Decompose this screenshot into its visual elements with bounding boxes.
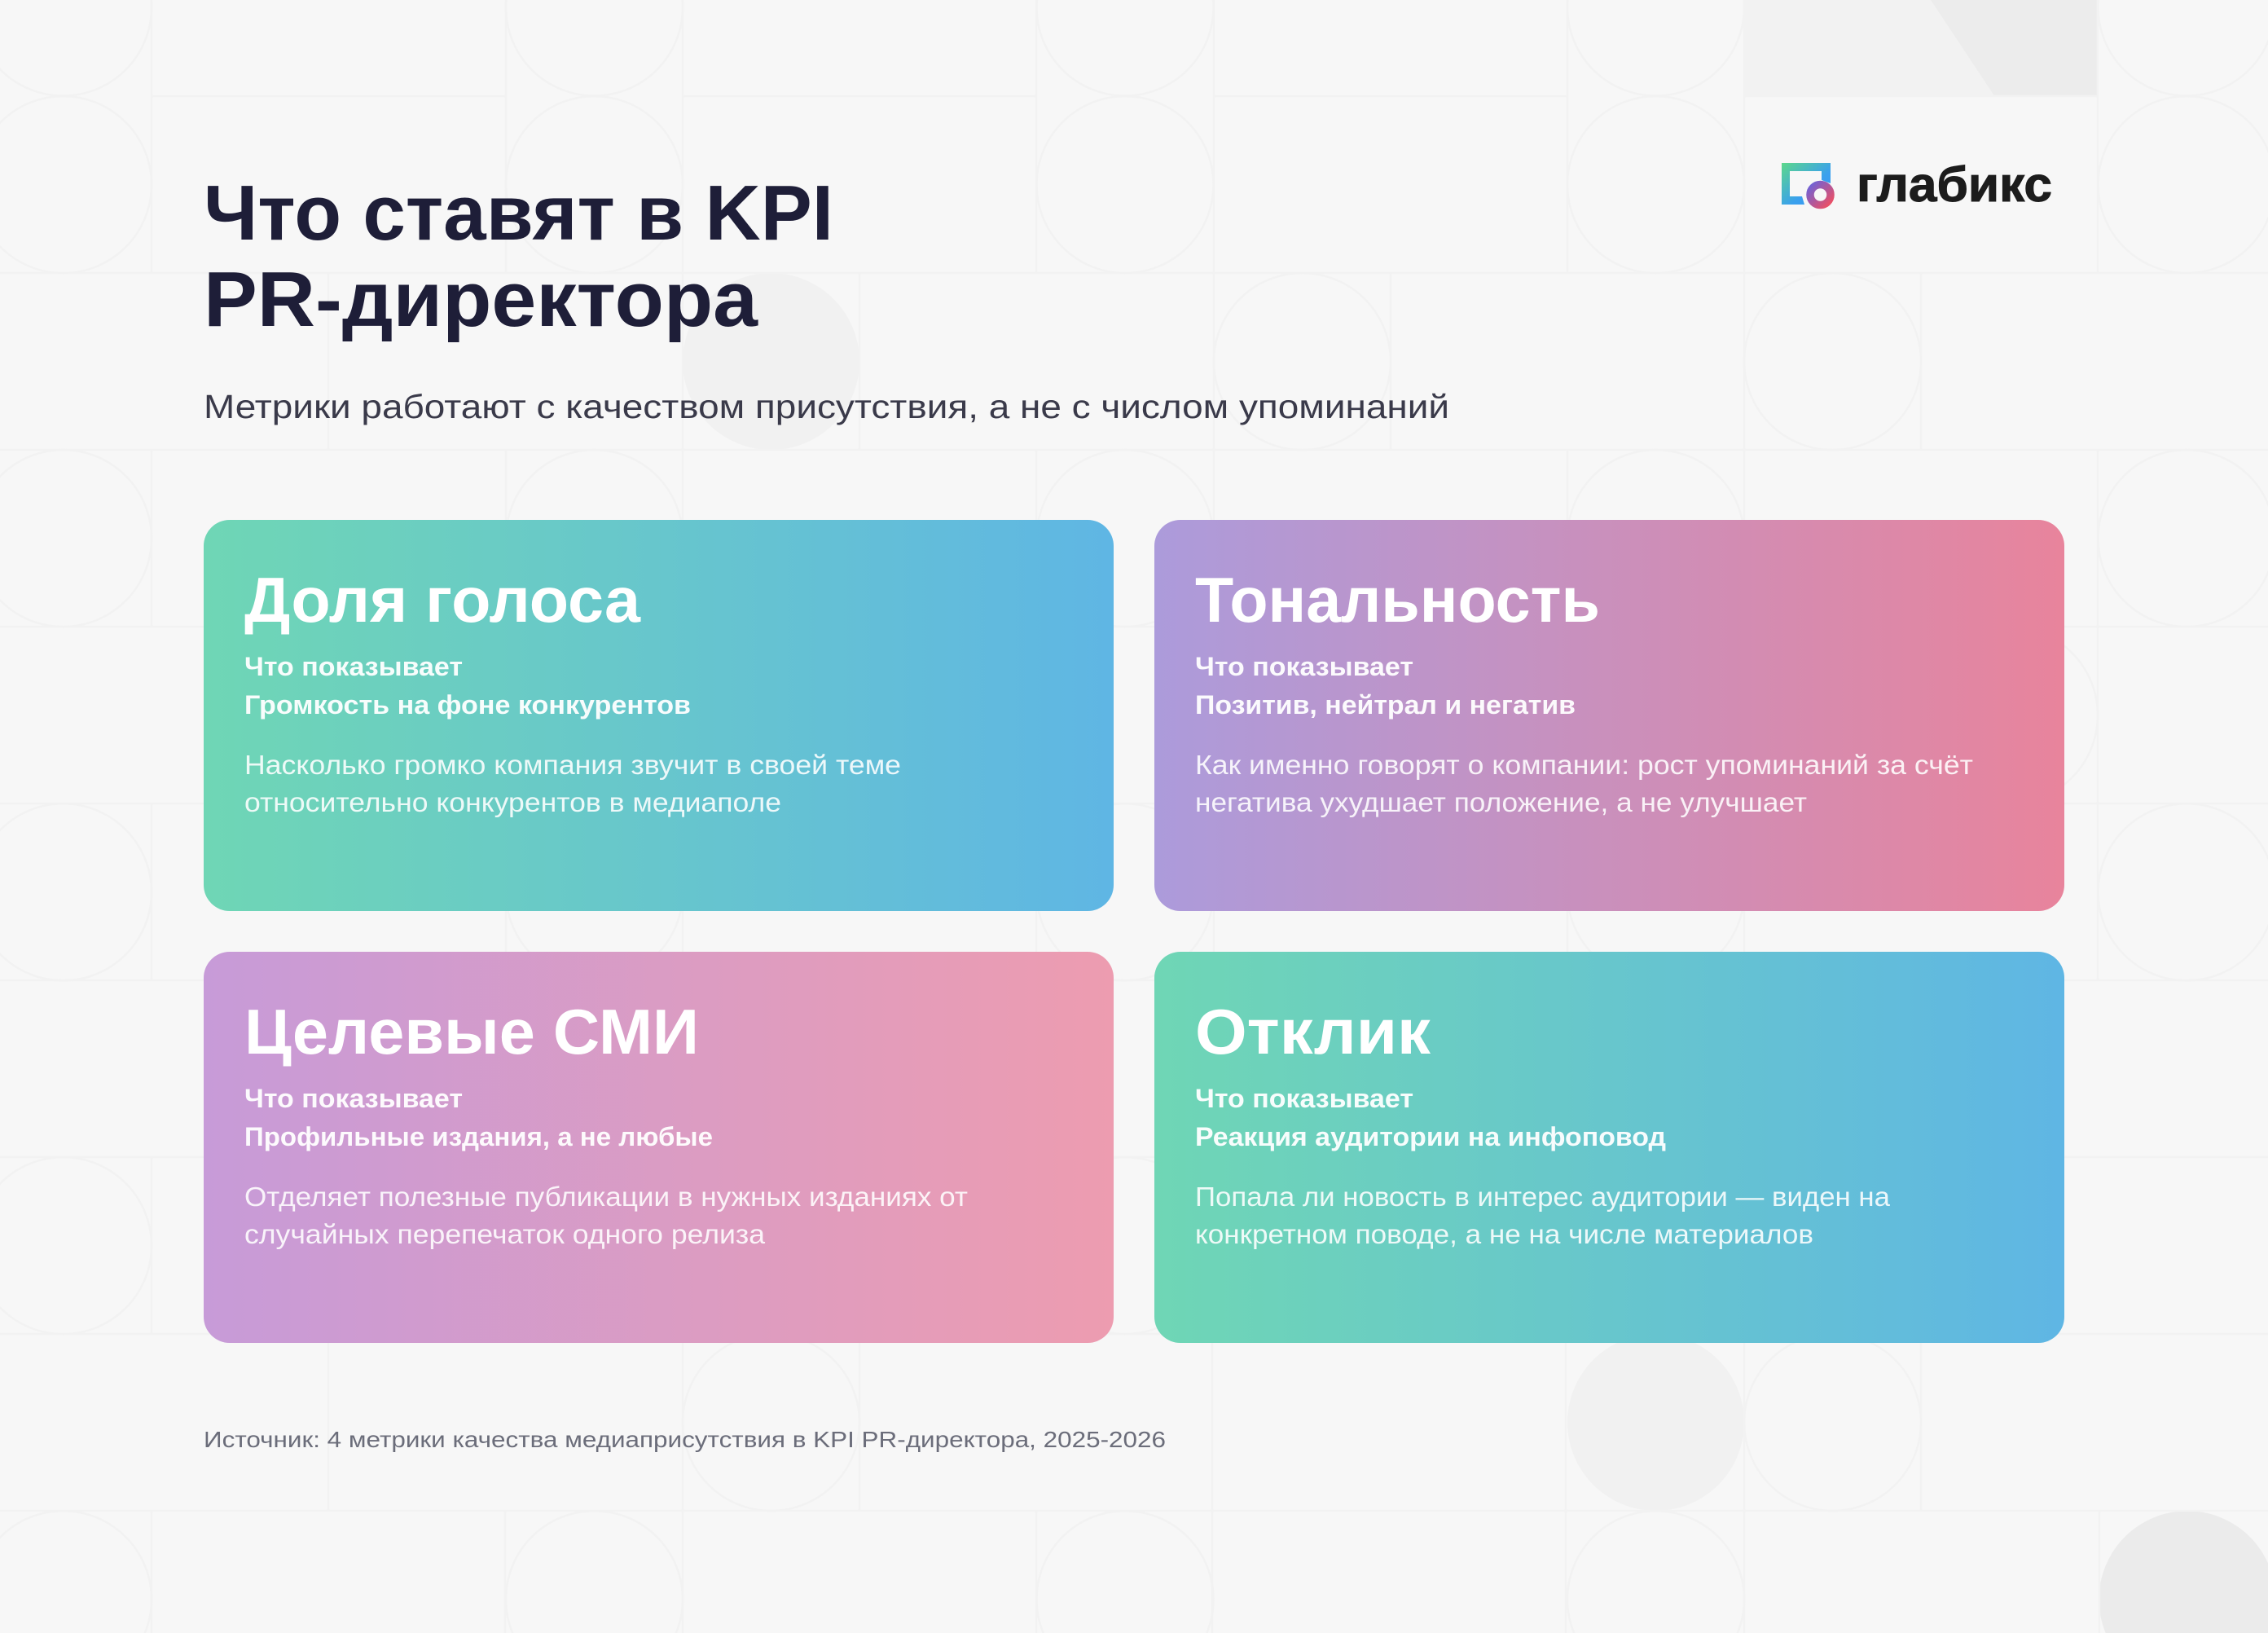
description: относительно конкурентов в медиаполе — [244, 787, 781, 817]
card background — [1154, 520, 2064, 911]
subheading: Что показывает — [244, 1084, 463, 1113]
description: случайных перепечаток одного релиза — [244, 1219, 766, 1249]
title: PR-директора — [204, 256, 758, 343]
description: негатива ухудшает положение, а не улучшает — [1195, 787, 1807, 817]
subheading: Профильные издания, а не любые — [244, 1122, 713, 1151]
card background — [1154, 952, 2064, 1343]
description — [1195, 750, 1973, 817]
subheading — [244, 652, 691, 720]
card background — [204, 520, 1114, 911]
logo wordmark: глабикс — [1857, 157, 2052, 212]
subtitle: Метрики работают с качеством присутствия, а не с числом упоминаний — [204, 388, 1449, 425]
description: Отделяет полезные публикации в нужных изданиях от — [244, 1182, 968, 1212]
subheading — [1195, 1084, 1666, 1151]
card heading: Отклик — [1195, 996, 1431, 1067]
description — [1195, 1182, 1891, 1249]
logo: глабикс — [1782, 157, 2052, 212]
description — [244, 1182, 968, 1249]
subheading: Что показывает — [1195, 1084, 1413, 1113]
source note: Источник: 4 метрики качества медиаприсутствия в KPI PR-директора, 2025-2026 — [204, 1427, 1166, 1452]
subheading: Громкость на фоне конкурентов — [244, 690, 691, 720]
description: Насколько громко компания звучит в своей теме — [244, 750, 901, 780]
title — [204, 169, 833, 343]
description: конкретном поводе, а не на числе материалов — [1195, 1219, 1813, 1249]
subheading: Реакция аудитории на инфоповод — [1195, 1122, 1666, 1151]
panel: Отклик — [1154, 952, 2064, 1343]
card heading: Тональность — [1195, 564, 1600, 636]
subheading: Что показывает — [1195, 652, 1413, 681]
card heading: Целевые СМИ — [244, 996, 699, 1067]
subheading: Что показывает — [244, 652, 463, 681]
panel: Тональность — [1154, 520, 2064, 911]
card heading: Доля голоса — [244, 564, 641, 636]
subheading: Позитив, нейтрал и негатив — [1195, 690, 1576, 720]
panel: Целевые СМИ — [204, 952, 1114, 1343]
panel: Доля голоса — [204, 520, 1114, 911]
card background — [204, 952, 1114, 1343]
subheading — [244, 1084, 713, 1151]
description: Попала ли новость в интерес аудитории — виден на — [1195, 1182, 1891, 1212]
description — [244, 750, 901, 817]
description: Как именно говорят о компании: рост упоминаний за счёт — [1195, 750, 1973, 780]
subheading — [1195, 652, 1576, 720]
icon: logo square with ring — [1782, 163, 1831, 205]
title: Что ставят в KPI — [204, 169, 833, 257]
